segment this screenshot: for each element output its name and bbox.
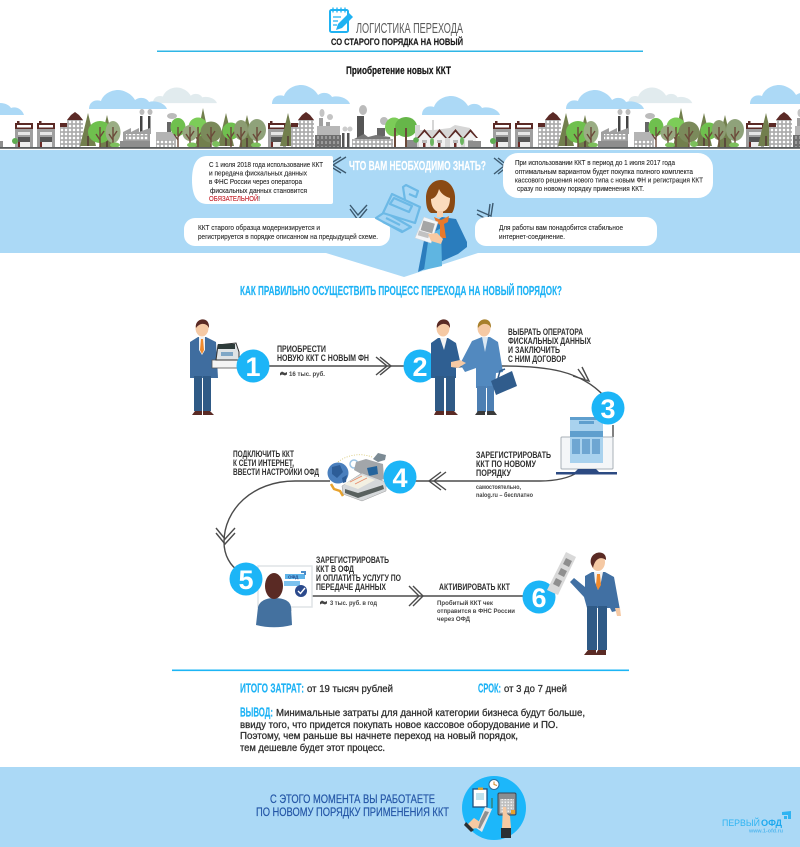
main question heading: КАК ПРАВИЛЬНО ОСУЩЕСТВИТЬ ПРОЦЕСС ПЕРЕХОДА НА НОВЫЙ ПОРЯДОК? xyxy=(240,283,562,298)
flow path connecting all steps xyxy=(216,357,613,606)
bubble: buy new kit: кассового решения нового типа с новым ФН и регистрация ККТ xyxy=(515,176,703,184)
bubble: mandatory from 1 July 2018 xyxy=(192,156,333,204)
step 5 text: И ОПЛАТИТЬ УСЛУГУ ПО xyxy=(316,573,401,583)
step 2 text xyxy=(508,327,591,364)
bubble: mandatory from 1 July 2018: ОБЯЗАТЕЛЬНОЙ! xyxy=(209,194,260,203)
woman with document xyxy=(415,180,467,272)
total cost: от 19 тысяч рублей xyxy=(307,683,393,695)
cityscape xyxy=(0,105,800,149)
step 1: man with register xyxy=(190,319,243,415)
step 6 number xyxy=(522,580,556,614)
step 6 text xyxy=(437,582,515,623)
brand logo: www.1-ofd.ru xyxy=(748,828,783,834)
icon: cash register outline xyxy=(376,185,420,232)
step 2 text: С НИМ ДОГОВОР xyxy=(508,354,566,364)
step 3 number xyxy=(592,392,624,424)
bubble: stable internet: Для работы вам понадобится стабильное xyxy=(499,223,623,232)
step 5 text xyxy=(316,555,401,607)
bubble: buy new kit xyxy=(503,153,713,198)
chevrons: right xyxy=(494,158,508,174)
step 2 text: ВЫБРАТЬ ОПЕРАТОРА xyxy=(508,327,583,337)
step 1 text xyxy=(277,344,369,378)
bubble: buy new kit: При использовании ККТ в период до 1 июля 2017 года xyxy=(515,158,676,167)
clouds xyxy=(0,85,800,115)
step 3 text: самостоятельно, xyxy=(476,484,521,491)
subtitle: СО СТАРОГО ПОРЯДКА НА НОВЫЙ xyxy=(331,36,463,48)
term: СРОК: xyxy=(478,682,501,696)
step 5: person at screen: ОФД xyxy=(288,574,299,580)
step 4: globe and cash register xyxy=(328,453,386,501)
chevrons: left xyxy=(328,157,346,173)
conclusion text xyxy=(240,706,585,754)
term: от 3 до 7 дней xyxy=(504,683,567,695)
title: ЛОГИСТИКА ПЕРЕХОДА xyxy=(356,20,463,37)
footer message xyxy=(256,794,449,819)
step 2 number: 2 xyxy=(412,352,428,382)
step 1 text: НОВУЮ ККТ С НОВЫМ ФН xyxy=(277,353,369,363)
step 6 text: АКТИВИРОВАТЬ ККТ xyxy=(439,582,510,592)
chevrons: down xyxy=(350,205,367,220)
brand logo xyxy=(722,811,791,834)
bubble: mandatory from 1 July 2018: С 1 июля 2018 года использование ККТ xyxy=(209,160,323,169)
step 1 number xyxy=(236,350,270,382)
footer message: С ЭТОГО МОМЕНТА ВЫ РАБОТАЕТЕ xyxy=(270,794,435,806)
step 3 text: ПОРЯДКУ xyxy=(476,468,511,478)
step 5 text: ПЕРЕДАЧЕ ДАННЫХ xyxy=(316,582,386,592)
conclusion text: ВЫВОД: xyxy=(240,706,273,720)
bubble: stable internet xyxy=(475,217,657,246)
step 3 text: ККТ ПО НОВОМУ xyxy=(476,459,536,469)
divider xyxy=(172,670,629,671)
step 1 text: ПРИОБРЕСТИ xyxy=(277,344,326,354)
header icon: notepad with pencil xyxy=(330,8,353,32)
step 2: two men shaking hands xyxy=(431,319,517,415)
conclusion text: Поэтому, чем раньше вы начнете переход на новый порядок, xyxy=(240,730,518,742)
total cost: ИТОГО ЗАТРАТ: xyxy=(240,682,304,696)
conclusion text: Минимальные затраты для данной категории бизнеса будут больше, xyxy=(276,707,585,719)
step 1 number: 1 xyxy=(245,352,261,382)
bubble: old device modernised xyxy=(184,218,390,246)
bubble: mandatory from 1 July 2018: и передача фискальных данных xyxy=(209,168,307,178)
bubble: mandatory from 1 July 2018: фискальных данных становится xyxy=(210,186,307,195)
step 5 text: 3 тыс. руб. в год xyxy=(330,599,377,607)
conclusion text: тем дешевле будет этот процесс. xyxy=(240,742,385,754)
bubble: old device modernised: регистрируется в порядке описанном на предыдущей схеме. xyxy=(198,232,378,241)
blue info panel xyxy=(0,150,800,277)
step 4 text: ПОДКЛЮЧИТЬ ККТ xyxy=(233,449,294,459)
step 4 number xyxy=(384,460,416,494)
step 5 text: ККТ В ОФД xyxy=(316,564,355,574)
step 4 text: ВВЕСТИ НАСТРОЙКИ ОФД xyxy=(233,466,320,477)
section title: Приобретение новых ККТ xyxy=(346,65,451,77)
step 6 text: через ОФД xyxy=(437,616,470,623)
footer band xyxy=(0,767,800,847)
step 3 number: 3 xyxy=(600,394,616,424)
step 2 number xyxy=(404,350,436,382)
brand logo: ПЕРВЫЙ xyxy=(722,817,760,829)
step 4 text xyxy=(233,449,320,477)
footer message: ПО НОВОМУ ПОРЯДКУ ПРИМЕНЕНИЯ ККТ xyxy=(256,807,449,819)
step 3 text: nalog.ru – бесплатно xyxy=(476,491,533,499)
chevrons: lower left xyxy=(477,203,493,220)
step 3: monitor with form xyxy=(556,417,617,474)
step 3 text: ЗАРЕГИСТРИРОВАТЬ xyxy=(476,450,552,460)
step 3 text xyxy=(476,450,552,499)
step 1 text: 16 тыс. руб. xyxy=(289,370,325,378)
footer icon: hands, calculator, clock xyxy=(462,776,526,840)
bubble: old device modernised: ККТ старого образца модернизируется и xyxy=(198,223,320,232)
step 6 number: 6 xyxy=(531,583,547,613)
bubble: buy new kit: сразу по новому порядку применения ККТ. xyxy=(517,184,644,193)
step 2 text: И ЗАКЛЮЧИТЬ xyxy=(508,345,561,355)
bubble: buy new kit: оптимальным вариантом будет покупка полного комплекта xyxy=(515,167,694,176)
step 6 text: Пробитый ККТ чек xyxy=(437,599,494,607)
step 5 number xyxy=(230,562,262,596)
step 5 text: ЗАРЕГИСТРИРОВАТЬ xyxy=(316,555,390,565)
brand logo: ОФД xyxy=(761,818,782,829)
heading: what you need to know: ЧТО ВАМ НЕОБХОДИМО ЗНАТЬ? xyxy=(349,159,486,173)
term xyxy=(478,682,567,696)
total cost xyxy=(240,682,393,696)
step 6: man with receipt xyxy=(547,552,621,655)
step 2 text: ФИСКАЛЬНЫХ ДАННЫХ xyxy=(508,336,591,346)
bubble: stable internet: интернет-соединение. xyxy=(499,232,565,241)
step 4 text: К СЕТИ ИНТЕРНЕТ, xyxy=(233,458,294,468)
conclusion text: ввиду того, что придется покупать новое кассовое оборудование и ПО. xyxy=(240,719,558,731)
step 6 text: отправится в ФНС России xyxy=(437,608,515,615)
step 5 number: 5 xyxy=(238,565,254,595)
bubble: mandatory from 1 July 2018: в ФНС России через оператора xyxy=(209,177,303,186)
step 5: person at screen xyxy=(256,566,312,627)
step 4 number: 4 xyxy=(392,463,408,493)
